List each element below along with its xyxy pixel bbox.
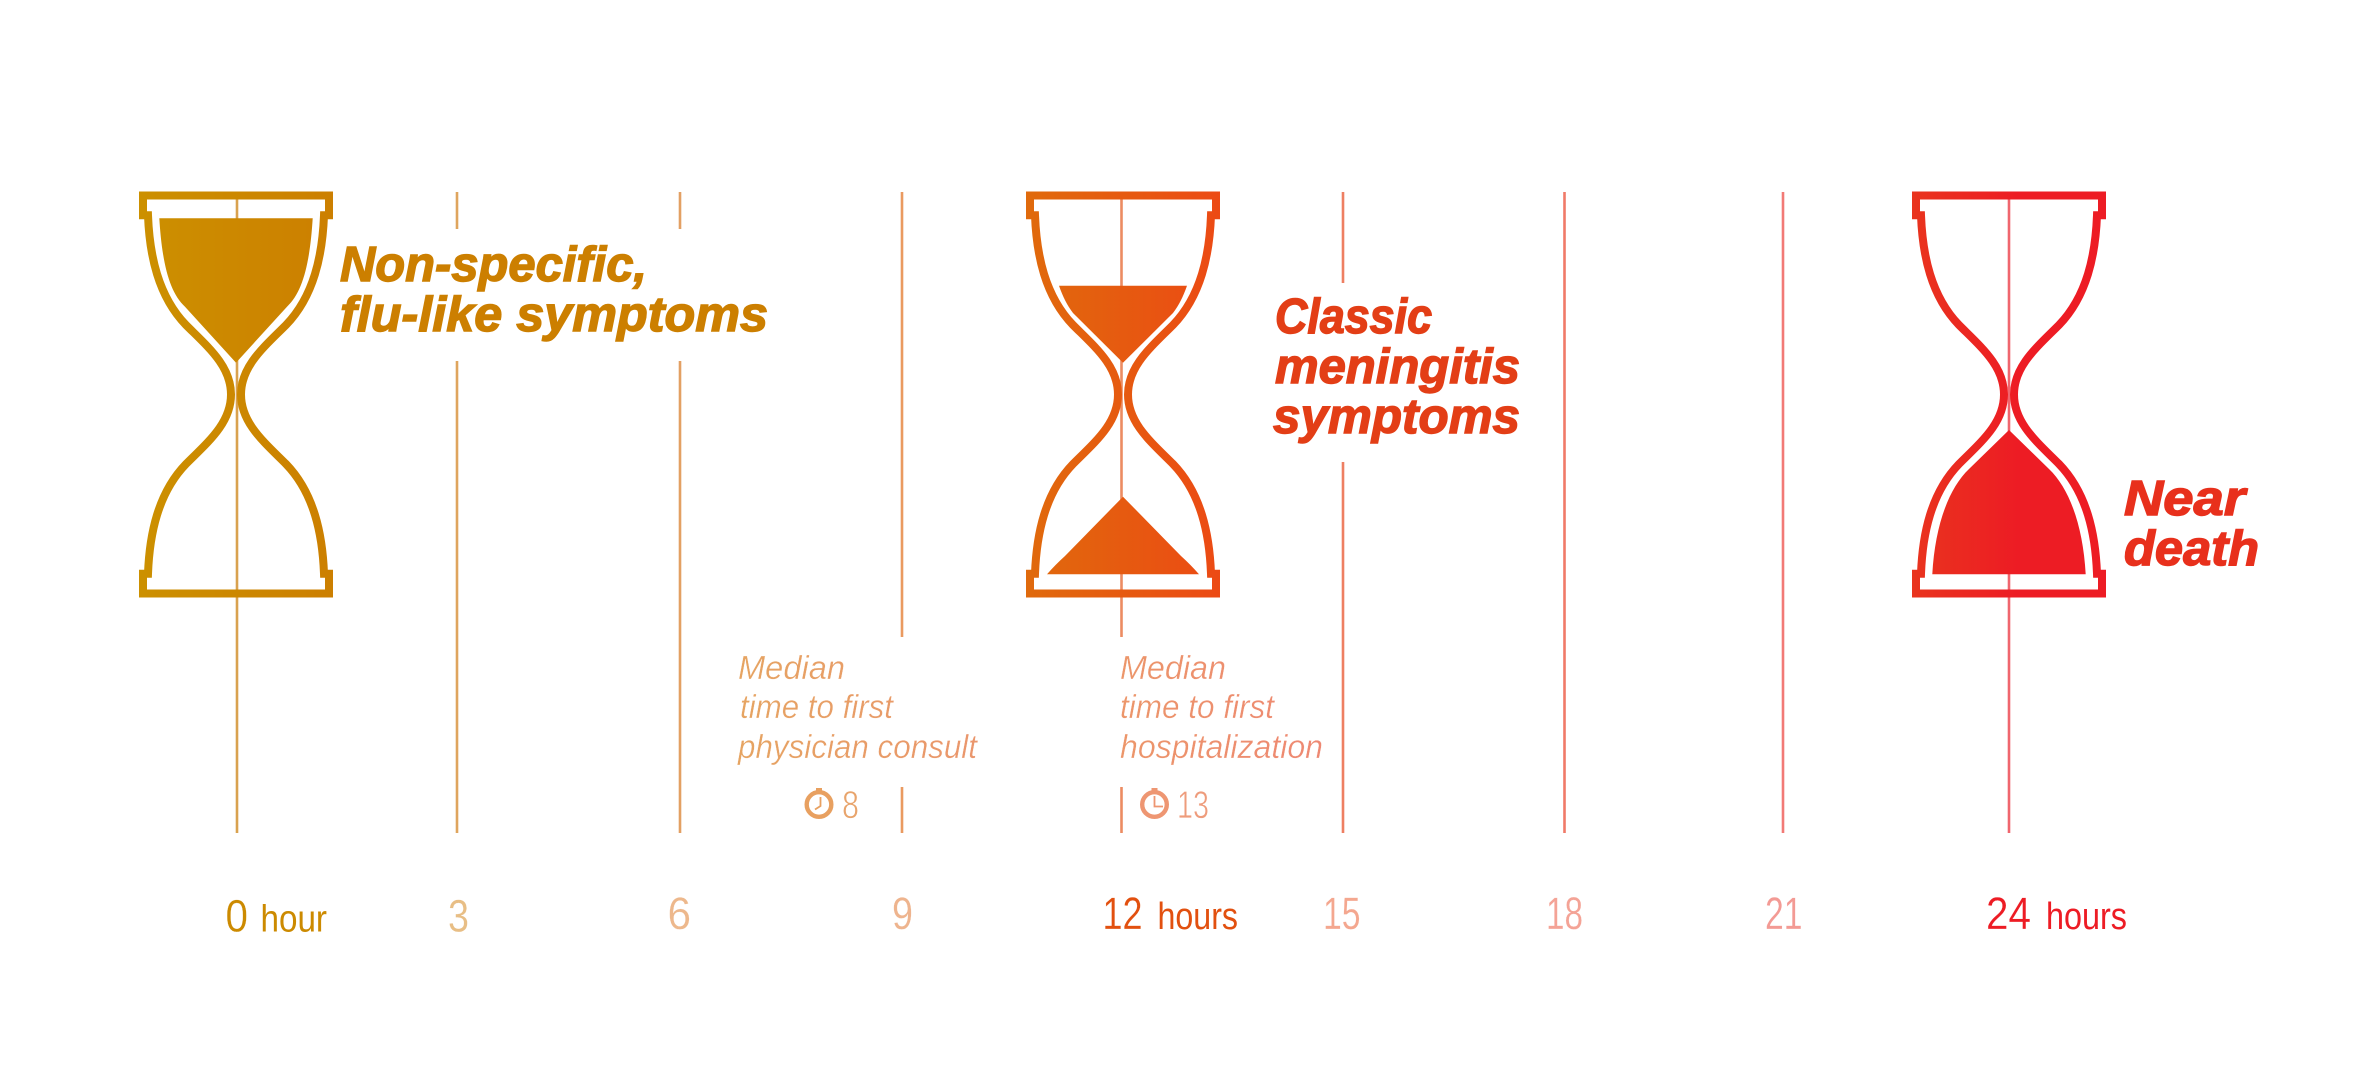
axis label: 0 hour: hour: [260, 898, 327, 940]
heading: non-specific symptoms: Non-specific,: [340, 238, 647, 292]
axis label: 24 hours: 24: [1986, 888, 2031, 939]
callout: median time to first hospitalization: time to first: [1120, 688, 1276, 725]
axis label: 6: 6: [668, 888, 691, 939]
hourglass: 0 hour, top bulb full: [143, 196, 329, 594]
axis label: 0 hour: 0: [226, 890, 248, 942]
heading: classic meningitis symptoms: symptoms: [1273, 390, 1520, 444]
hourglass: 12 hours, half run through: [1030, 196, 1216, 594]
axis label: 24 hours: [1986, 888, 2127, 939]
axis label: 12 hours: hours: [1158, 896, 1238, 938]
heading: non-specific symptoms: flu-like symptoms: [340, 288, 768, 342]
axis label: 24 hours: hours: [2046, 896, 2127, 938]
value: 13 hours: 13: [1177, 784, 1209, 827]
value: 8 hours: 8: [842, 784, 859, 827]
axis label: 15: 15: [1323, 888, 1360, 939]
axis label: 9: 9: [892, 888, 913, 939]
axis label: 21: 21: [1765, 888, 1802, 939]
icon: stopwatch at 8 hours: [807, 788, 831, 817]
axis label: 18: 18: [1546, 888, 1583, 939]
callout: median time to first physician consult: Median: [738, 649, 845, 686]
heading: classic meningitis symptoms: Classic: [1275, 290, 1432, 344]
heading: near death: [2124, 472, 2259, 576]
icon: stopwatch at 13 hours: [1142, 788, 1167, 817]
callout: median time to first hospitalization: hospitalization: [1120, 728, 1323, 765]
callout: median time to first hospitalization: [1120, 649, 1323, 765]
heading: near death: death: [2124, 522, 2259, 576]
heading: near death: Near: [2124, 472, 2248, 526]
callout: median time to first physician consult: [737, 649, 979, 765]
heading: classic meningitis symptoms: [1273, 290, 1520, 444]
heading: classic meningitis symptoms: meningitis: [1275, 340, 1520, 394]
callout: median time to first physician consult: time to first: [740, 688, 895, 725]
callout: median time to first hospitalization: Median: [1120, 649, 1226, 686]
axis label: 12 hours: [1102, 888, 1238, 939]
timeline grid lines: [237, 192, 2009, 833]
callout: median time to first physician consult: physician consult: [737, 728, 979, 765]
heading: non-specific symptoms: [340, 238, 768, 342]
hourglass: 24 hours, bottom bulb full: [1916, 196, 2102, 594]
axis label: 3: 3: [448, 890, 469, 942]
axis label: 0 hour: [226, 890, 327, 942]
axis label: 12 hours: 12: [1102, 888, 1142, 939]
